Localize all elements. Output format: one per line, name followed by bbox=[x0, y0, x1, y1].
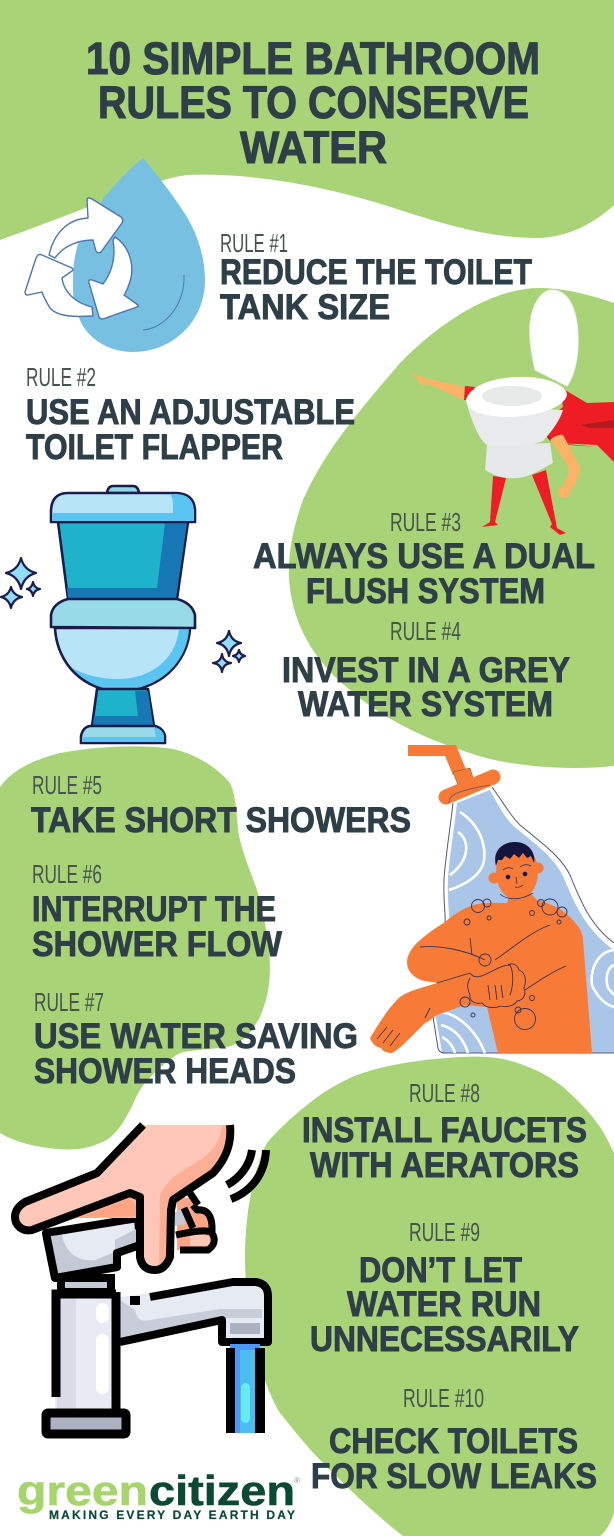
rule 5: RULE #5 bbox=[32, 770, 102, 800]
rule 9: WATER RUN bbox=[347, 1285, 541, 1324]
rule 8: INSTALL FAUCETS bbox=[302, 1111, 587, 1150]
body lines and bubbles bbox=[420, 899, 567, 1030]
logo: green citizen: ® bbox=[294, 1476, 300, 1485]
faucet body bbox=[55, 1292, 117, 1410]
green blob: rules 3 and 4 bbox=[289, 288, 614, 768]
rule 10 bbox=[311, 1383, 597, 1496]
faucet spout bbox=[120, 1282, 268, 1342]
title bbox=[86, 33, 540, 173]
title: RULES TO CONSERVE bbox=[98, 77, 529, 128]
icon: blue toilet bbox=[1, 486, 245, 743]
arm right bbox=[550, 435, 580, 498]
rule 7: RULE #7 bbox=[34, 987, 104, 1017]
rule 8: WITH AERATORS bbox=[310, 1146, 579, 1185]
icon: superhero toilet bbox=[410, 290, 614, 535]
base bbox=[81, 726, 165, 743]
rule 4: RULE #4 bbox=[390, 616, 461, 646]
water outline bbox=[433, 787, 614, 1053]
logo: green citizen bbox=[17, 1467, 300, 1522]
soap foam bbox=[468, 964, 525, 1008]
rule 5 bbox=[31, 770, 411, 840]
rule 5: TAKE SHORT SHOWERS bbox=[31, 801, 411, 840]
recycling arrow: right bbox=[89, 237, 138, 319]
title: WATER bbox=[240, 122, 387, 173]
head bbox=[488, 872, 500, 884]
rule 3 bbox=[253, 507, 595, 611]
title: 10 SIMPLE BATHROOM bbox=[86, 33, 540, 84]
water fill bbox=[436, 790, 614, 1053]
rule 9: RULE #9 bbox=[409, 1217, 480, 1247]
hair bbox=[495, 842, 534, 866]
water ripples bbox=[441, 812, 614, 1053]
recycling arrow: top bbox=[49, 198, 123, 258]
rim bbox=[466, 377, 567, 417]
arm left bbox=[410, 372, 465, 400]
connector bbox=[61, 1278, 111, 1292]
shower head bbox=[446, 777, 493, 797]
stem bbox=[92, 689, 154, 726]
logo: green citizen: citizen bbox=[149, 1467, 295, 1514]
rule 8 bbox=[302, 1078, 587, 1185]
green blob: header bbox=[0, 0, 614, 240]
rule 4: WATER SYSTEM bbox=[298, 685, 553, 724]
rule 10: RULE #10 bbox=[403, 1383, 484, 1413]
faucet base bbox=[46, 1413, 126, 1434]
rule 6 bbox=[32, 859, 282, 964]
rule 4 bbox=[282, 616, 570, 724]
rule 1: RULE #1 bbox=[220, 228, 288, 258]
rule 1: REDUCE THE TOILET bbox=[220, 253, 532, 292]
knob bbox=[107, 486, 139, 493]
rule 2 bbox=[26, 362, 355, 467]
rule 2: TOILET FLAPPER bbox=[26, 428, 283, 467]
tank bbox=[58, 522, 188, 599]
green blob: rules 8 to 10 bbox=[245, 1057, 614, 1536]
rule 3: RULE #3 bbox=[390, 507, 461, 537]
curled fingers bbox=[177, 1197, 216, 1250]
bowl bbox=[55, 628, 190, 691]
rule 6: INTERRUPT THE bbox=[32, 890, 276, 929]
legs bbox=[482, 476, 506, 527]
base bbox=[485, 443, 553, 478]
tank lid bbox=[51, 493, 195, 522]
rule 9 bbox=[310, 1217, 579, 1359]
rule 6: SHOWER FLOW bbox=[32, 925, 282, 964]
falling water bbox=[230, 1344, 260, 1433]
rule 3: FLUSH SYSTEM bbox=[306, 572, 545, 611]
illustration: hand on faucet bbox=[15, 1125, 268, 1434]
recycling arrow: left bbox=[25, 254, 93, 316]
body bbox=[370, 893, 592, 1053]
cape bbox=[542, 387, 614, 462]
hand bbox=[15, 1125, 229, 1270]
sparkles bbox=[1, 558, 245, 672]
rule 7: USE WATER SAVING bbox=[34, 1017, 358, 1056]
rule 1: TANK SIZE bbox=[220, 288, 390, 327]
rule 2: USE AN ADJUSTABLE bbox=[26, 393, 355, 432]
rule 9: DON’T LET bbox=[359, 1251, 522, 1290]
logo: green citizen: MAKING EVERY DAY EARTH DAY bbox=[49, 1508, 295, 1522]
lid bbox=[530, 290, 578, 386]
illustration: man in shower bbox=[370, 745, 614, 1053]
icon: water drop with recycling arrows bbox=[25, 158, 205, 352]
rule 10: CHECK TOILETS bbox=[329, 1422, 578, 1461]
rule 3: ALWAYS USE A DUAL bbox=[253, 537, 595, 576]
bowl bbox=[467, 405, 563, 446]
rule 2: RULE #2 bbox=[26, 362, 96, 392]
handle bbox=[46, 1218, 140, 1278]
green blob: rules 5 to 7 bbox=[0, 746, 270, 1149]
rule 1 bbox=[220, 228, 532, 327]
rule 8: RULE #8 bbox=[409, 1078, 480, 1108]
rule 7 bbox=[34, 987, 358, 1091]
rule 7: SHOWER HEADS bbox=[34, 1052, 296, 1091]
face bbox=[500, 865, 533, 899]
rule 4: INVEST IN A GREY bbox=[282, 651, 570, 690]
motion lines bbox=[227, 1150, 266, 1199]
logo: green citizen: green bbox=[17, 1467, 148, 1514]
shower pipe bbox=[408, 745, 467, 775]
rule 9: UNNECESSARILY bbox=[310, 1320, 579, 1359]
rule 6: RULE #6 bbox=[32, 859, 102, 889]
seat band bbox=[51, 599, 195, 628]
